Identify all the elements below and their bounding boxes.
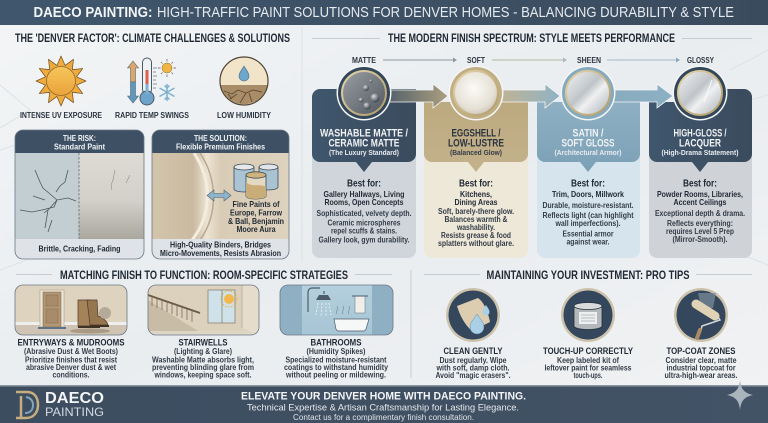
card: satin: (Architectural Armor) xyxy=(554,148,622,157)
brands text: Moore Aura xyxy=(236,225,276,234)
text: touch-up: touch-ups. xyxy=(574,371,602,380)
card: high-gloss: Reflects everything: xyxy=(667,219,733,228)
call to action: Contact us for a complimentary finish consultation. xyxy=(293,413,474,422)
spectrum labels: MATTE xyxy=(352,56,376,65)
text: bathrooms: without peeling or mildewing. xyxy=(285,370,386,380)
card: washable matte: CERAMIC MATTE xyxy=(328,138,400,150)
card: eggshell: EGGSHELL / xyxy=(452,128,500,140)
text: entryways: ENTRYWAYS & MUDROOMS xyxy=(18,338,124,348)
icon: soft swatch xyxy=(448,66,504,120)
text: entryways: (Abrasive Dust & Wet Boots) xyxy=(24,347,118,356)
text: top-coat: ultra-high-wear areas. xyxy=(664,371,738,380)
text: bathrooms xyxy=(284,338,388,380)
card: high-gloss: (Mirror-Smooth). xyxy=(672,235,728,244)
card: satin: Trim, Doors, Millwork xyxy=(552,190,624,199)
icon: sun xyxy=(36,56,86,106)
risk header: THE RISK: xyxy=(63,134,96,143)
brands text: Europe, Farrow xyxy=(230,208,283,218)
card: satin: Best for: xyxy=(571,178,605,190)
text: stairwells xyxy=(152,338,254,380)
text: stairwells: preventing blinding glare from xyxy=(152,363,254,372)
card: eggshell xyxy=(424,102,528,258)
text: touch-up: Keep labeled kit of xyxy=(557,356,619,365)
text: entryways: abrasive Denver dust & wet xyxy=(26,363,116,372)
logo wordmark: PAINTING xyxy=(45,405,104,419)
card: high-gloss: HIGH-GLOSS / xyxy=(674,128,726,140)
card: washable matte: Sophisticated, velvety depth. xyxy=(316,209,412,218)
panel: the risk xyxy=(15,130,144,259)
text: touch-up: leftover paint for seamless xyxy=(544,364,632,372)
card: eggshell: washability. xyxy=(456,223,495,232)
text: entryways: conditions. xyxy=(52,370,90,380)
header banner xyxy=(0,0,768,25)
card: high-gloss: Powder Rooms, Libraries, xyxy=(657,190,743,199)
card: high-gloss: Accent Ceilings xyxy=(674,198,727,207)
spectrum labels: SOFT xyxy=(467,56,485,65)
icon: paint roller xyxy=(674,288,728,342)
card: eggshell: LOW-LUSTRE xyxy=(448,138,504,150)
solution caption: Micro-Movements, Resists Abrasion xyxy=(160,249,281,258)
text: top-coat xyxy=(664,346,738,380)
label: uv: INTENSE UV EXPOSURE xyxy=(20,111,102,120)
card: washable matte: Gallery look, gym durability. xyxy=(318,236,410,244)
arrow: flex xyxy=(207,190,231,201)
title: DAECO PAINTING: xyxy=(34,5,152,21)
logo mark xyxy=(16,392,38,418)
card: eggshell: Kitchens, xyxy=(460,190,492,199)
brands text: & Ball, Benjamin xyxy=(228,217,284,226)
text: entryways: Prioritize finishes that resist xyxy=(25,356,117,364)
card: eggshell: (Balanced Glow) xyxy=(450,148,503,157)
illustration: bathroom xyxy=(280,285,393,335)
text: stairwells: (Lighting & Glare) xyxy=(174,347,232,356)
icon: sheen swatch xyxy=(560,66,616,120)
icon: gloss swatch xyxy=(672,66,728,120)
text: clean gently: Dust regularly. Wipe xyxy=(440,356,507,365)
solution header: THE SOLUTION: xyxy=(194,134,247,143)
card: high-gloss: (High-Drama Statement) xyxy=(662,148,739,157)
card: satin: Essential armor xyxy=(562,230,614,238)
card: washable matte: (The Luxury Standard) xyxy=(329,148,400,157)
text: clean gently xyxy=(436,346,510,380)
footer banner xyxy=(0,380,768,423)
icon: low humidity xyxy=(220,57,268,105)
spectrum labels: SHEEN xyxy=(577,56,601,65)
arrow: matte to soft xyxy=(388,84,448,108)
arrow: sheen to glossy xyxy=(612,84,673,108)
panel: the solution xyxy=(152,130,289,259)
text: stairwells: STAIRWELLS xyxy=(178,338,228,348)
heading: pro tips: MAINTAINING YOUR INVESTMENT: PRO TIPS xyxy=(486,270,690,282)
icon: paint can xyxy=(561,288,615,342)
text: clean gently: Avoid "magic erasers". xyxy=(436,371,510,380)
card: satin: SOFT GLOSS xyxy=(562,138,614,150)
text: clean gently: with soft, damp cloth. xyxy=(436,364,510,372)
card: high-gloss: Exceptional depth & drama. xyxy=(655,209,745,218)
text: stairwells: Washable Matte absorbs light, xyxy=(152,356,254,364)
card: washable matte: Ceramic microspheres xyxy=(328,218,401,228)
card: satin: wall imperfections). xyxy=(555,219,620,228)
label: temp swings: RAPID TEMP SWINGS xyxy=(115,111,189,120)
card: satin: against wear. xyxy=(566,238,610,246)
risk header xyxy=(15,130,144,153)
risk caption: Brittle, Cracking, Fading xyxy=(38,244,120,254)
call to action xyxy=(241,390,526,422)
arrow: soft to sheen xyxy=(500,84,560,108)
card: eggshell: Soft, barely-there glow. xyxy=(438,207,514,216)
solution header: Flexible Premium Finishes xyxy=(176,142,265,152)
label: low humidity: LOW HUMIDITY xyxy=(217,111,272,120)
text: bathrooms: Specialized moisture-resistant xyxy=(286,356,387,364)
card: washable matte: Best for: xyxy=(347,178,381,190)
card: eggshell: Resists grease & food xyxy=(441,231,511,240)
brands text: Fine Paints of xyxy=(232,200,280,209)
card: high-gloss: requires Level 5 Prep xyxy=(666,227,734,236)
card: washable matte: Gallery Hallways, Living xyxy=(324,190,404,199)
text: top-coat: TOP-COAT ZONES xyxy=(666,346,736,356)
icon: matte swatch xyxy=(336,66,392,120)
card: satin: SATIN / xyxy=(572,128,604,140)
text: stairwells: windows, keeping space soft. xyxy=(154,370,252,380)
text: top-coat: Consider clear, matte xyxy=(666,356,737,365)
card: eggshell: splatters without glare. xyxy=(438,239,514,248)
solution caption: High-Quality Binders, Bridges xyxy=(170,240,271,250)
text: bathrooms: BATHROOMS xyxy=(310,338,362,348)
text: top-coat: industrial topcoat for xyxy=(666,364,736,372)
card: satin: Durable, moisture-resistant. xyxy=(542,201,634,210)
card: washable matte: Rooms, Open Concepts xyxy=(324,198,404,207)
spectrum labels xyxy=(352,56,715,65)
text: bathrooms: (Humidity Spikes) xyxy=(306,347,366,356)
logo wordmark xyxy=(45,390,104,419)
card: eggshell: Best for: xyxy=(459,178,493,190)
icon: sparkle xyxy=(727,380,753,410)
icon: paint cans xyxy=(234,164,278,199)
call to action: Technical Expertise & Artisan Craftsmanship for Lasting Elegance. xyxy=(247,402,519,414)
text: bathrooms: coatings to withstand humidity xyxy=(284,363,388,372)
text: clean gently: CLEAN GENTLY xyxy=(444,346,502,356)
heading: denver factor: THE 'DENVER FACTOR': CLIMATE CHALLENGES & SOLUTIONS xyxy=(15,33,290,45)
card: eggshell: Dining Areas xyxy=(454,198,498,207)
text: touch-up: TOUCH-UP CORRECTLY xyxy=(543,346,633,356)
icon: temperature swings xyxy=(128,58,176,105)
icon: cloth and drops xyxy=(446,288,500,342)
logo wordmark: DAECO xyxy=(45,390,104,407)
text: entryways xyxy=(18,338,124,380)
card: satin xyxy=(537,102,640,258)
card: washable matte: repel scuffs & stains. xyxy=(331,226,397,236)
card: washable matte: WASHABLE MATTE / xyxy=(320,128,408,140)
text: touch-up xyxy=(543,346,633,380)
card: eggshell: Balances warmth & xyxy=(444,215,508,224)
solution header xyxy=(152,130,289,153)
solution caption xyxy=(160,240,281,258)
illustration: stairwell xyxy=(148,285,259,335)
heading: rooms: MATCHING FINISH TO FUNCTION: ROOM-SPECIFIC STRATEGIES xyxy=(60,270,348,282)
brands text xyxy=(228,200,284,234)
card: high-gloss: LACQUER xyxy=(679,138,721,150)
call to action: ELEVATE YOUR DENVER HOME WITH DAECO PAINTING. xyxy=(241,390,526,402)
heading: finish spectrum: THE MODERN FINISH SPECTRUM: STYLE MEETS PERFORMANCE xyxy=(388,33,675,45)
illustration: entryway xyxy=(15,285,127,335)
card: satin: Reflects light (can highlight xyxy=(542,211,634,220)
card: washable matte xyxy=(312,89,416,258)
spectrum labels: GLOSSY xyxy=(687,56,715,65)
risk header: Standard Paint xyxy=(54,142,105,152)
card: high-gloss xyxy=(649,89,752,258)
card: high-gloss: Best for: xyxy=(683,178,717,190)
